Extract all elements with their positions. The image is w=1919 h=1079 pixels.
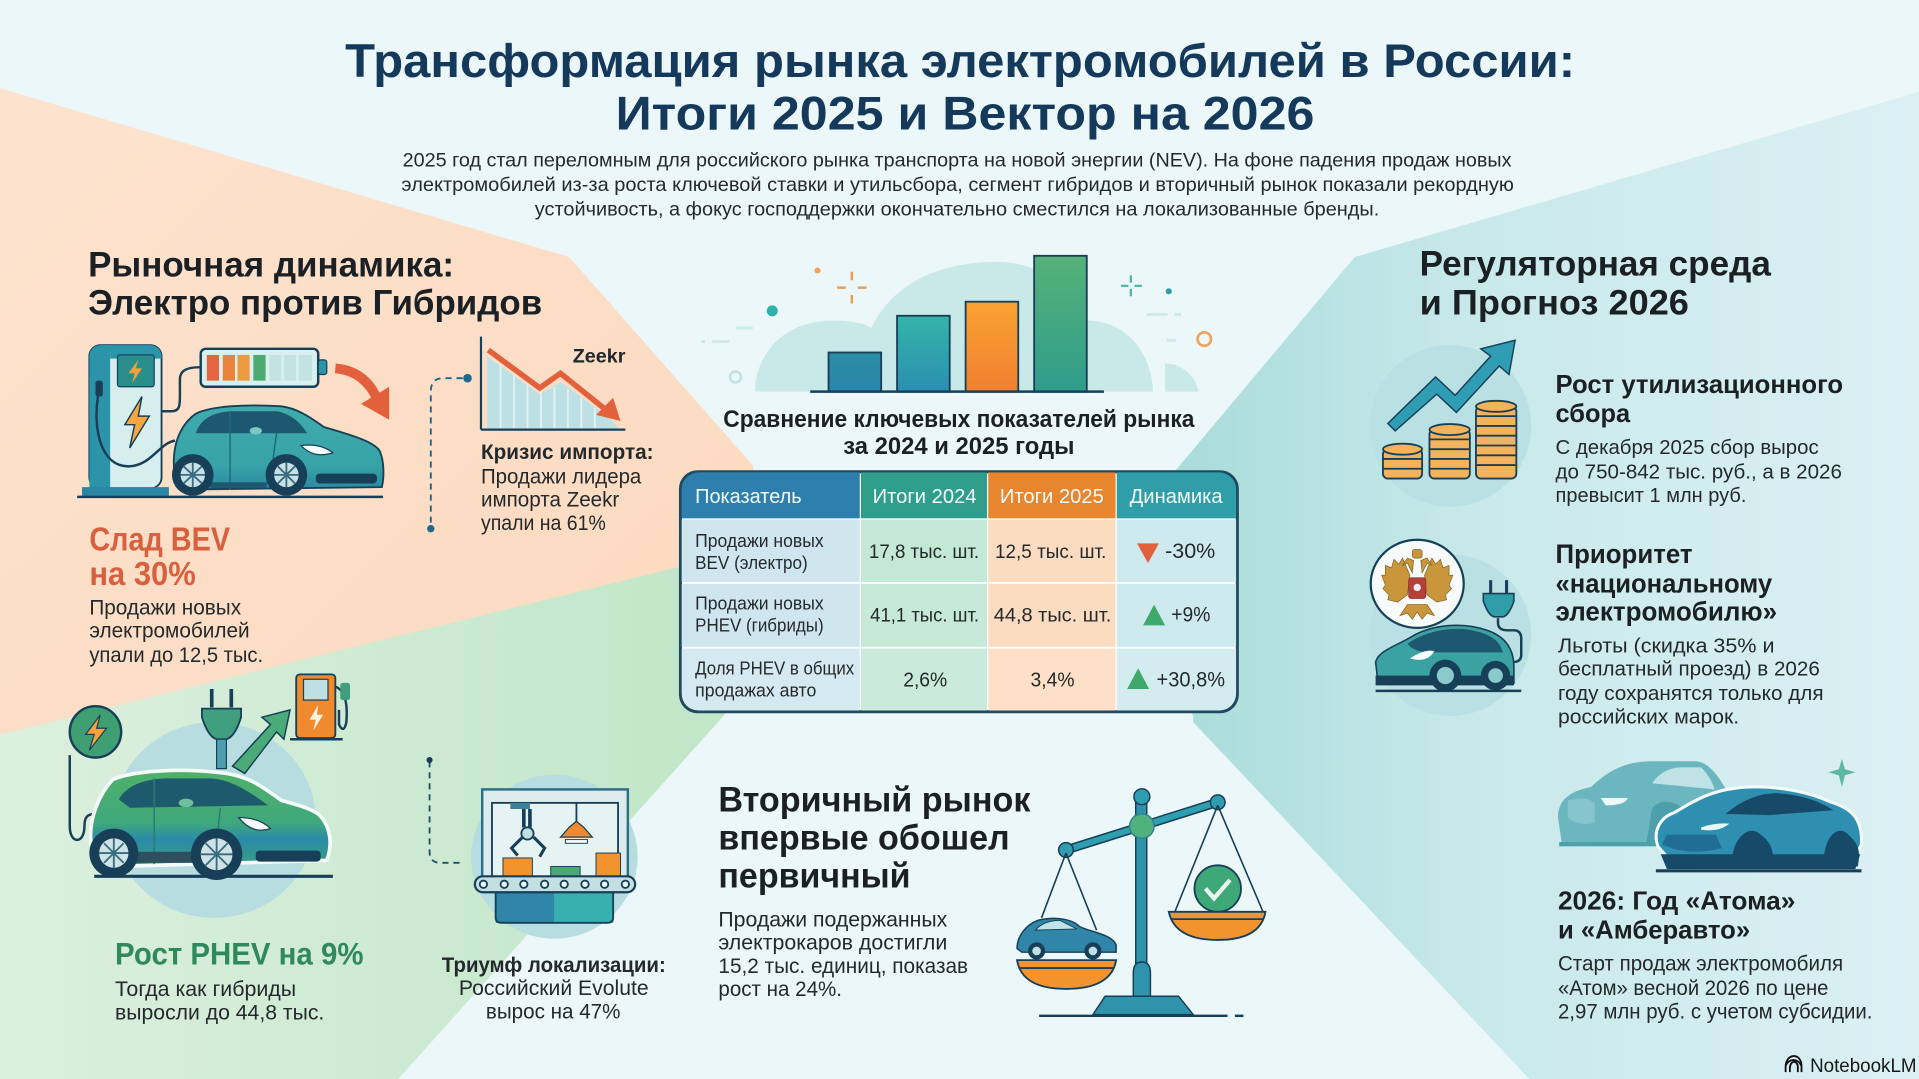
row: PHEV share: +30,8%: [1157, 669, 1225, 692]
heading: market dynamics: Рыночная динамика:: [88, 245, 454, 285]
heading: comparison table: [723, 406, 1195, 460]
text: secondary market: Продажи подержанных: [718, 908, 948, 931]
text: import crisis: импорта Zeekr: [481, 489, 619, 512]
icon: factory conveyor: [471, 775, 638, 939]
text: national EV priority: Приоритет: [1556, 539, 1693, 569]
sparkle: [1828, 759, 1855, 787]
text: import crisis: Кризис импорта:: [481, 441, 654, 464]
row: PHEV share: Доля PHEV в общих: [695, 657, 854, 678]
stat: BEV decline: Продажи новых: [89, 596, 242, 619]
text: national EV priority: электромобилю»: [1556, 597, 1777, 627]
heading: market dynamics: [88, 245, 542, 323]
row: PHEV sales: 41,1 тыс. шт.: [870, 606, 979, 627]
row: BEV sales: Продажи новых: [695, 530, 824, 551]
car: green hybrid: [89, 770, 330, 880]
row: PHEV share: продажах авто: [695, 679, 816, 700]
title: [345, 34, 1575, 140]
row: PHEV sales: [695, 593, 1210, 636]
row: BEV sales: 17,8 тыс. шт.: [869, 542, 979, 563]
table cells: [682, 520, 1236, 710]
text: national EV priority: [1556, 539, 1824, 728]
text: recycling fee: [1556, 371, 1843, 507]
heading: market dynamics: Электро против Гибридов: [88, 283, 542, 323]
heading: comparison table: Сравнение ключевых показателей рынка: [723, 406, 1195, 433]
text: national EV priority: году сохранятся только для: [1558, 683, 1824, 705]
text: national EV priority: Льготы (скидка 35% и: [1558, 635, 1775, 657]
text: secondary market: первичный: [718, 855, 911, 895]
text: secondary market: впервые обошел: [718, 817, 1010, 857]
car: teal hatchback: [172, 405, 383, 496]
row: PHEV share: 2,6%: [903, 670, 947, 692]
text: import crisis: [481, 441, 654, 535]
text: 2026 Atom and Amberavto: 2026: Год «Атома»: [1558, 887, 1795, 915]
text: 2026 Atom and Amberavto: и «Амберавто»: [1558, 917, 1750, 945]
row: PHEV sales: Продажи новых: [695, 593, 824, 614]
connector: dashed to localization: [427, 757, 464, 863]
title: Трансформация рынка электромобилей в России:: [345, 34, 1575, 87]
icon: scales: [1017, 789, 1265, 1016]
table header: Итоги 2025: [1000, 486, 1104, 508]
text: 2026 Atom and Amberavto: [1558, 887, 1872, 1023]
text: national EV priority: российских марок.: [1558, 706, 1739, 728]
text: import crisis: упали на 61%: [481, 512, 606, 535]
heading: comparison table: за 2024 и 2025 годы: [843, 433, 1075, 460]
stat: BEV decline: Слад BEV: [89, 522, 230, 559]
text: recycling fee: С декабря 2025 сбор вырос: [1556, 437, 1819, 459]
icon: charging station with car: [77, 345, 389, 497]
intro text: электромобилей из-за роста ключевой ставки и утильсбора, сегмент гибридов и вторичный рынок показали рекордную: [401, 174, 1514, 196]
stat: BEV decline: упали до 12,5 тыс.: [89, 644, 263, 667]
connector: dashed to import crisis: [427, 374, 472, 532]
stat: BEV decline: на 30%: [89, 556, 196, 593]
chart: rising bars illustration: [701, 256, 1211, 392]
text: national EV priority: бесплатный проезд) в 2026: [1558, 659, 1820, 681]
text: recycling fee: сбора: [1556, 400, 1631, 428]
chart: Zeekr decline: Zeekr: [573, 346, 626, 367]
intro text: устойчивость, а фокус господдержки окончательно сместился на локализованные бренды.: [535, 198, 1379, 220]
chart: Zeekr decline: [481, 337, 626, 430]
stat: PHEV growth: Тогда как гибриды: [115, 978, 296, 1001]
text: localization triumph: Триумф локализации:: [442, 954, 666, 977]
text: import crisis: Продажи лидера: [481, 465, 642, 488]
row: PHEV sales: +9%: [1171, 604, 1210, 627]
row: PHEV share: 3,4%: [1030, 670, 1075, 692]
row: PHEV share: [695, 657, 1225, 700]
text: secondary market: Вторичный рынок: [718, 779, 1031, 819]
intro text: 2025 год стал переломным для российского рынка транспорта на новой энергии (NEV). На фоне падения продаж новых: [403, 149, 1512, 171]
row: BEV sales: [695, 530, 1215, 573]
table header: Динамика: [1130, 486, 1223, 508]
text: 2026 Atom and Amberavto: 2,97 млн руб. с учетом субсидии.: [1558, 1000, 1872, 1023]
text: national EV priority: «национальному: [1556, 568, 1772, 598]
heading: regulation: Регуляторная среда: [1420, 243, 1771, 283]
row: PHEV sales: PHEV (гибриды): [695, 615, 824, 636]
text: secondary market: рост на 24%.: [718, 978, 842, 1001]
text: localization triumph: [442, 954, 666, 1023]
title: Итоги 2025 и Вектор на 2026: [616, 87, 1314, 140]
row: BEV sales: -30%: [1165, 540, 1215, 563]
icon: national EV with emblem: [1369, 540, 1531, 716]
row: BEV sales: BEV (электро): [695, 552, 808, 573]
stat: BEV decline: [89, 522, 263, 667]
battery: [201, 349, 327, 387]
stat: PHEV growth: [115, 935, 363, 1024]
text: localization triumph: Российский Evolute: [459, 977, 649, 1000]
emblem: [1382, 550, 1453, 619]
stat: PHEV growth: выросли до 44,8 тыс.: [115, 1001, 324, 1024]
heading: regulation: [1420, 243, 1771, 323]
icon: recycling fee growth: [1369, 340, 1531, 507]
fuel pump: [290, 674, 350, 739]
arrow: decline: [335, 368, 389, 420]
row: PHEV sales: 44,8 тыс. шт.: [994, 606, 1111, 627]
icon: Atom and Amberavto cars: [1558, 759, 1862, 871]
text: recycling fee: Рост утилизационного: [1556, 371, 1843, 399]
text: localization triumph: вырос на 47%: [486, 1000, 620, 1023]
table header: Показатель: [695, 486, 802, 508]
text: 2026 Atom and Amberavto: Старт продаж электромобиля: [1558, 953, 1843, 976]
plug and cable: [1483, 580, 1521, 662]
icon: hybrid car with plug and pump: [70, 674, 350, 918]
text: 2026 Atom and Amberavto: «Атом» весной 2026 по цене: [1558, 977, 1828, 1000]
small car on scale: [1017, 918, 1116, 960]
logo: NotebookLM: NotebookLM: [1810, 1056, 1917, 1077]
plug: [202, 689, 241, 769]
row: BEV sales: 12,5 тыс. шт.: [995, 542, 1106, 563]
text: secondary market: электрокаров достигли: [718, 932, 947, 955]
intro text: [401, 149, 1514, 220]
heading: regulation: и Прогноз 2026: [1420, 283, 1689, 323]
table header: [682, 472, 1236, 518]
text: recycling fee: до 750-842 тыс. руб., а в 2026: [1556, 462, 1842, 484]
table header: Итоги 2024: [873, 486, 977, 508]
stat: PHEV growth: Рост PHEV на 9%: [115, 935, 363, 971]
text: recycling fee: превысит 1 млн руб.: [1556, 485, 1746, 507]
front car: [1656, 787, 1862, 871]
coin stacks: [1383, 401, 1516, 479]
text: secondary market: 15,2 тыс. единиц, показав: [718, 955, 968, 978]
table: key indicators: [680, 472, 1237, 712]
text: secondary market: [718, 779, 1031, 1001]
stat: BEV decline: электромобилей: [89, 620, 250, 643]
back car: [1558, 761, 1728, 846]
